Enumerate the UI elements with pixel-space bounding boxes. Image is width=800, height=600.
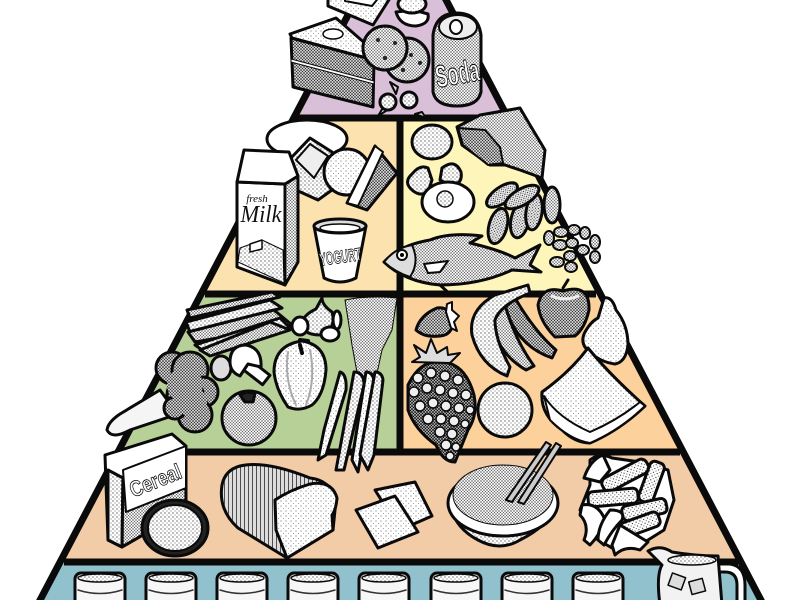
icon: broccoli	[107, 352, 218, 435]
panel: protein tier	[400, 118, 596, 294]
icon: water pitcher	[648, 548, 745, 600]
icon: pear	[583, 298, 628, 364]
icon: watermelon	[542, 348, 645, 443]
icon: bell pepper	[274, 340, 326, 409]
icon: chocolate bar	[328, 0, 392, 25]
label: milk: Milk	[240, 202, 282, 228]
icon: bread loaf	[221, 464, 337, 558]
icon: orange	[478, 383, 532, 437]
icon: milk carton	[237, 150, 298, 285]
icon: bananas	[471, 285, 556, 376]
label: yogurt: YOGURT	[318, 244, 362, 270]
icon: peanuts	[483, 178, 560, 246]
panel: vegetables tier	[122, 294, 400, 452]
icon: chopsticks	[506, 442, 561, 504]
icon: candy swirl	[396, 0, 428, 26]
icon: pasta	[580, 455, 674, 555]
icon: whole egg	[412, 125, 452, 159]
panel: sweets tier	[296, 0, 504, 116]
icon: carrots	[318, 297, 397, 472]
icon: cheese wedges	[324, 146, 397, 210]
icon: beans	[544, 225, 600, 272]
panel: grains tier	[64, 452, 738, 562]
panel: water tier	[40, 562, 760, 600]
label: cereal: Cereal	[126, 459, 185, 502]
icon: glasses of water	[75, 573, 623, 600]
label: soda: Soda	[433, 52, 482, 95]
icon: cake slice	[290, 18, 375, 107]
icon: cereal box	[105, 434, 186, 547]
icon: wrapped candies	[378, 82, 426, 118]
icon: swiss cheese block	[291, 138, 332, 200]
icon: steak	[457, 108, 545, 178]
icon: garlic	[292, 298, 341, 341]
icon: cheese wheel	[267, 120, 347, 158]
panel: dairy tier	[205, 118, 400, 294]
icon: tomato	[222, 391, 276, 445]
icon: asparagus	[186, 292, 292, 356]
icon: cookies	[363, 26, 429, 82]
icon: soda can	[433, 13, 482, 106]
icon: grapes	[408, 339, 475, 462]
panel: fruit tier	[400, 294, 680, 452]
label: fresh: fresh	[246, 193, 268, 205]
icon: cereal bowl	[142, 500, 208, 556]
icon: fish	[384, 235, 541, 296]
icon: yogurt cup	[314, 219, 366, 282]
icon: cracked egg	[408, 164, 474, 222]
icon: apple	[538, 280, 589, 337]
icon: rice bowl	[448, 442, 561, 546]
icon: strawberry	[416, 302, 459, 336]
icon: mushrooms	[211, 345, 270, 385]
icon: crackers	[356, 482, 432, 548]
